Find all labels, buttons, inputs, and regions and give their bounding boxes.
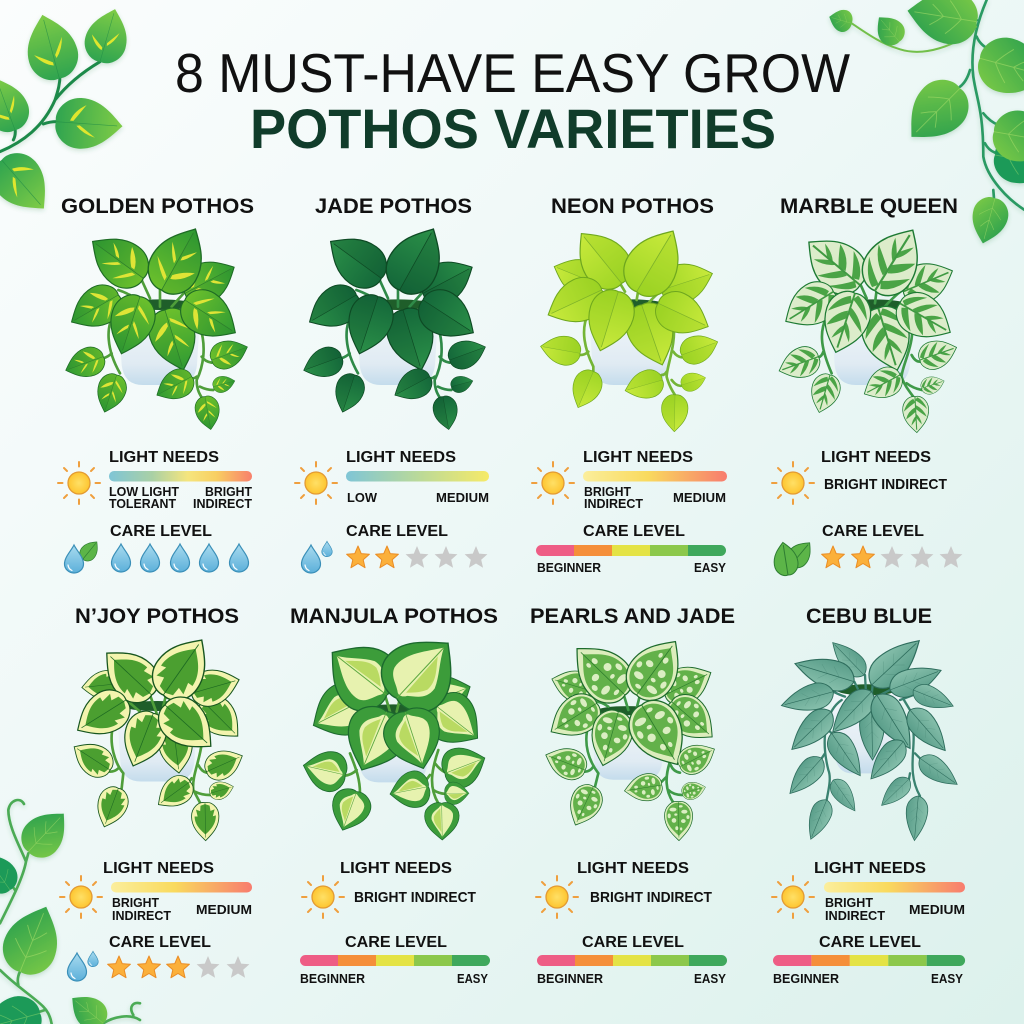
plant: neon pothos <box>538 218 722 432</box>
light needs: jade pothos: MEDIUM <box>436 490 489 505</box>
heading: n'joy pothos: N’JOY POTHOS <box>75 604 239 628</box>
plant: jade pothos <box>299 217 490 432</box>
title <box>175 42 850 160</box>
panel: neon pothos <box>532 194 727 575</box>
care level: marble queen <box>771 523 962 577</box>
decoration: top-right vine <box>826 0 1024 248</box>
light needs: pearls and jade: LIGHT NEEDS <box>577 860 689 877</box>
plant: pearls and jade <box>540 628 725 841</box>
care level: cebu blue: CARE LEVEL <box>819 934 921 951</box>
care level: neon pothos: CARE LEVEL <box>583 523 685 540</box>
light needs: neon pothos: MEDIUM <box>673 490 726 505</box>
light needs: golden pothos: LIGHT NEEDS <box>109 449 219 466</box>
care level: pearls and jade: EASY <box>694 971 726 986</box>
light needs: manjula pothos: LIGHT NEEDS <box>340 860 452 877</box>
plant: n'joy pothos <box>66 626 250 841</box>
care level: jade pothos <box>302 523 487 573</box>
care level: pearls and jade: BEGINNER <box>537 971 604 986</box>
light needs: cebu blue: BRIGHT <box>825 895 873 910</box>
light needs: n'joy pothos: MEDIUM <box>196 902 252 917</box>
light needs: cebu blue: MEDIUM <box>909 902 965 917</box>
panel: cebu blue <box>772 604 965 986</box>
decoration: bottom-left vine <box>0 800 140 1024</box>
plant: marble queen <box>774 217 961 433</box>
light needs: marble queen: LIGHT NEEDS <box>821 449 931 466</box>
panel: pearls and jade <box>530 604 735 986</box>
light needs: pearls and jade: BRIGHT INDIRECT <box>590 889 712 906</box>
care level: manjula pothos: BEGINNER <box>300 971 366 986</box>
light needs: jade pothos <box>295 449 489 505</box>
light needs: cebu blue: LIGHT NEEDS <box>814 860 926 877</box>
light needs: marble queen <box>772 449 947 504</box>
panel: jade pothos <box>295 194 490 573</box>
light needs: jade pothos: LOW <box>347 490 378 505</box>
light needs: jade pothos: LIGHT NEEDS <box>346 449 456 466</box>
light needs: golden pothos: INDIRECT <box>193 496 252 511</box>
light needs: n'joy pothos: BRIGHT <box>112 895 159 910</box>
care level: golden pothos <box>64 523 248 573</box>
heading: jade pothos: JADE POTHOS <box>315 194 472 218</box>
light needs: neon pothos: BRIGHT <box>584 484 631 499</box>
title: 8 MUST-HAVE EASY GROW <box>175 42 850 104</box>
care level: cebu blue: BEGINNER <box>773 971 840 986</box>
care level: cebu blue <box>773 934 965 986</box>
care level: cebu blue: EASY <box>931 971 963 986</box>
light needs: golden pothos: LOW LIGHT <box>109 484 179 499</box>
light needs: cebu blue <box>772 860 965 923</box>
care level: pearls and jade <box>537 934 727 986</box>
decoration: top-left vine <box>0 3 135 225</box>
heading: neon pothos: NEON POTHOS <box>551 194 714 218</box>
panel: n'joy pothos <box>60 604 252 981</box>
care level: n'joy pothos: CARE LEVEL <box>109 934 211 951</box>
care level: n'joy pothos <box>68 934 249 981</box>
light needs: pearls and jade <box>536 860 712 918</box>
light needs: manjula pothos <box>302 860 476 918</box>
care level: neon pothos <box>536 523 726 575</box>
light needs: golden pothos <box>58 449 252 511</box>
care level: pearls and jade: CARE LEVEL <box>582 934 684 951</box>
heading: golden pothos: GOLDEN POTHOS <box>61 194 254 218</box>
care level: manjula pothos: CARE LEVEL <box>345 934 447 951</box>
light needs: n'joy pothos: LIGHT NEEDS <box>103 860 214 877</box>
light needs: golden pothos: BRIGHT <box>205 484 252 499</box>
heading: cebu blue: CEBU BLUE <box>806 604 932 628</box>
plant: cebu blue <box>778 629 963 843</box>
light needs: neon pothos: INDIRECT <box>584 496 643 511</box>
care level: manjula pothos: EASY <box>457 971 488 986</box>
light needs: marble queen: BRIGHT INDIRECT <box>824 476 947 493</box>
light needs: cebu blue: INDIRECT <box>825 908 885 923</box>
care level: jade pothos: CARE LEVEL <box>346 523 448 540</box>
light needs: neon pothos <box>532 449 727 511</box>
panel: marble queen <box>771 194 962 577</box>
care level: manjula pothos <box>300 934 490 986</box>
light needs: n'joy pothos: INDIRECT <box>112 908 171 923</box>
care level: neon pothos: EASY <box>694 560 726 575</box>
light needs: neon pothos: LIGHT NEEDS <box>583 449 693 466</box>
plant: manjula pothos <box>299 619 493 840</box>
panel: golden pothos <box>58 194 254 573</box>
light needs: golden pothos: TOLERANT <box>109 496 176 511</box>
plant: golden pothos <box>61 217 252 432</box>
care level: marble queen: CARE LEVEL <box>822 523 924 540</box>
panel: manjula pothos <box>290 604 498 986</box>
heading: marble queen: MARBLE QUEEN <box>780 194 958 218</box>
care level: golden pothos: CARE LEVEL <box>110 523 212 540</box>
light needs: n'joy pothos <box>60 860 252 923</box>
title: POTHOS VARIETIES <box>250 97 776 160</box>
light needs: manjula pothos: BRIGHT INDIRECT <box>354 889 476 906</box>
heading: pearls and jade: PEARLS AND JADE <box>530 604 735 628</box>
heading: manjula pothos: MANJULA POTHOS <box>290 604 498 628</box>
care level: neon pothos: BEGINNER <box>537 560 602 575</box>
